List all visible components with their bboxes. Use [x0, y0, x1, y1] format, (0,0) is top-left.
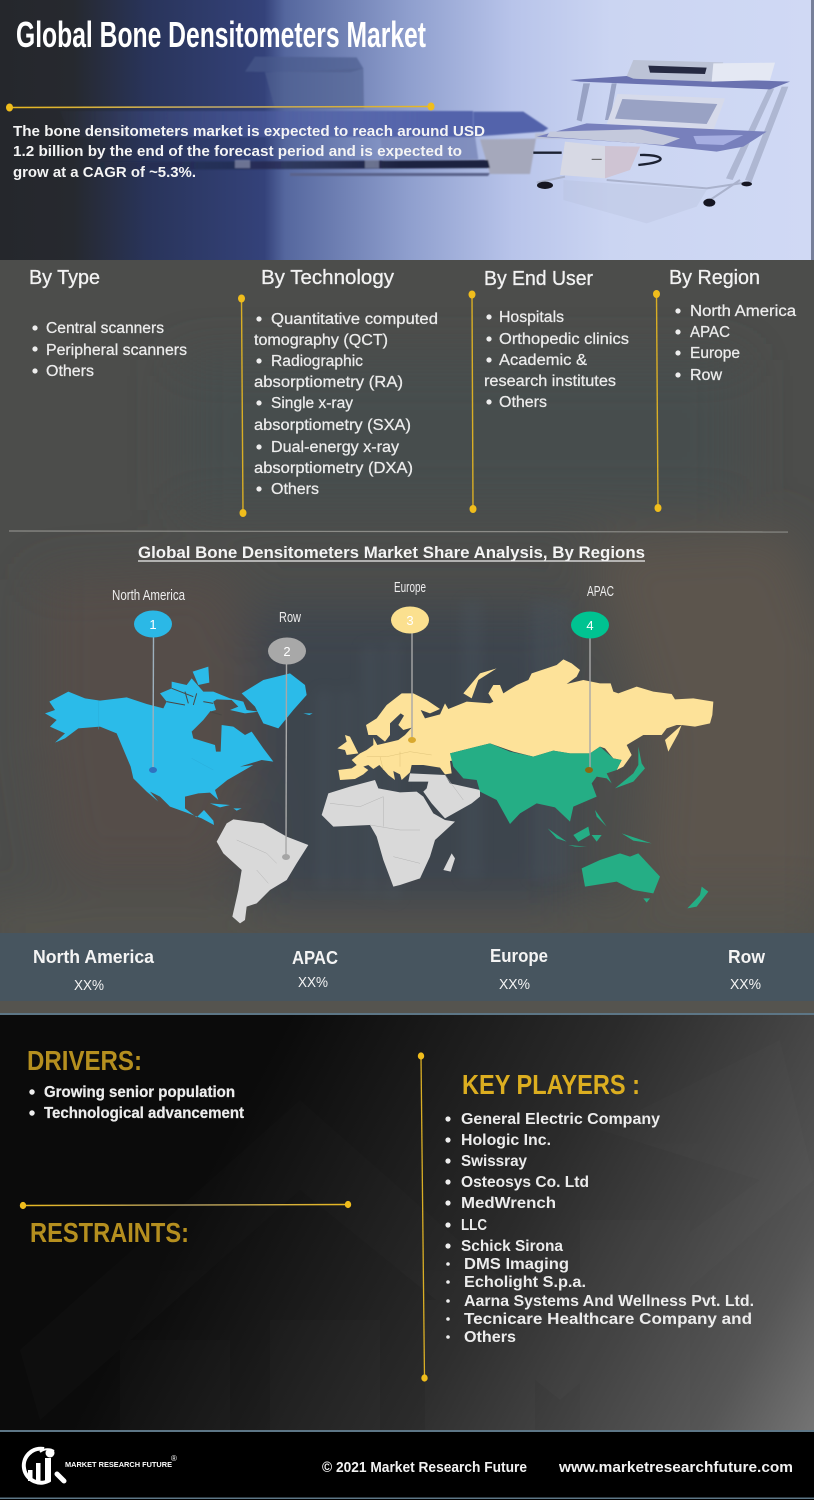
- section divider: [9, 531, 788, 532]
- map region: north america: [45, 667, 313, 825]
- pin 3: europe: Europe: [394, 579, 426, 596]
- list: regions: Row: [690, 367, 723, 384]
- illustration: computer cart: [533, 60, 790, 223]
- map region: greenland: [242, 673, 307, 728]
- list: key players: Schick Sirona: [461, 1238, 563, 1255]
- pin 2: rest of world: [268, 609, 306, 860]
- list: technology segments: Others: [271, 481, 319, 498]
- list: regions: [676, 303, 796, 384]
- intro text: grow at a CAGR of ~5.3%.: [13, 164, 196, 181]
- panel: footer: [0, 1430, 814, 1500]
- legend: apac: APAC: [292, 948, 338, 968]
- pin 4: apac: 4: [586, 618, 594, 633]
- list: key players: Others: [464, 1329, 516, 1346]
- list: type segments: [32, 320, 187, 380]
- vertical gold line: [238, 294, 246, 517]
- pin 1: north america: [112, 587, 185, 773]
- logo: MARKET RESEARCH FUTURE: [65, 1462, 172, 1469]
- list: technology segments: Radiographic: [271, 353, 363, 370]
- list: key players: Swissray: [461, 1153, 527, 1170]
- legend: north america: XX%: [74, 977, 104, 994]
- intro text: [13, 123, 485, 181]
- map region: asia pacific: [450, 743, 708, 908]
- list: technology segments: absorptiometry (SXA): [254, 417, 411, 434]
- intro text: The bone densitometers market is expected to reach around USD: [13, 123, 485, 140]
- heading: by type: By Type: [29, 267, 100, 289]
- list: end user segments: Hospitals: [499, 309, 564, 326]
- list: key players: Aarna Systems And Wellness Pvt. Ltd.: [464, 1293, 754, 1310]
- list: key players: Hologic Inc.: [461, 1132, 551, 1149]
- list: technology segments: absorptiometry (DXA): [254, 460, 413, 477]
- legend: row: [728, 947, 766, 993]
- list: key players: Osteosys Co. Ltd: [461, 1174, 589, 1191]
- list: drivers: Technological advancement: [44, 1105, 244, 1122]
- panel: blurred photo background: [0, 260, 814, 933]
- pin 2: rest of world: 2: [283, 644, 291, 659]
- list: key players: MedWrench: [461, 1195, 556, 1212]
- pin 3: europe: 3: [406, 613, 414, 628]
- legend: europe: Europe: [490, 946, 548, 966]
- list: technology segments: Dual-energy x-ray: [271, 439, 399, 456]
- pin 1: north america: North America: [112, 587, 185, 604]
- list: end user segments: research institutes: [484, 373, 616, 390]
- panel: header banner: [0, 0, 814, 260]
- map region: rest of world: [217, 773, 480, 923]
- list: technology segments: absorptiometry (RA): [254, 374, 403, 391]
- list: key players: Echolight S.p.a.: [464, 1274, 586, 1291]
- pin 1: north america: 1: [149, 617, 157, 632]
- heading: restraints: RESTRAINTS:: [30, 1217, 189, 1248]
- list: end user segments: Academic &: [499, 352, 588, 369]
- panel: by end user: [468, 268, 629, 513]
- gold divider line: [6, 102, 434, 112]
- copyright: © 2021 Market Research Future: [322, 1459, 527, 1476]
- pin 4: apac: APAC: [587, 583, 614, 600]
- vertical gold line: [468, 290, 476, 513]
- title: Global Bone Densitometers Market: [16, 14, 426, 55]
- horizontal gold line: [20, 1201, 351, 1209]
- list: regions: APAC: [690, 324, 730, 341]
- list: end user segments: Others: [499, 394, 547, 411]
- vertical gold line: [653, 290, 662, 512]
- legend: row: XX%: [730, 976, 761, 993]
- panel: by region: [653, 267, 796, 512]
- list: regions: North America: [690, 303, 796, 320]
- legend: north america: North America: [33, 947, 155, 967]
- list: key players: Tecnicare Healthcare Company and: [464, 1311, 752, 1328]
- heading: by technology: By Technology: [261, 267, 394, 289]
- heading: by region: By Region: [669, 267, 760, 289]
- legend: europe: [490, 946, 548, 993]
- legend: row: Row: [728, 947, 766, 967]
- map region: europe and russia: [337, 659, 713, 780]
- illustration: bone densitometer scanner: [60, 57, 560, 176]
- logo: ®: [171, 1454, 177, 1463]
- panel: drivers, restraints and key players: [0, 1015, 814, 1431]
- pin 2: rest of world: Row: [279, 609, 301, 626]
- intro text: 1.2 billion by the end of the forecast period and is expected to: [13, 143, 462, 160]
- legend: north america: [33, 947, 155, 994]
- world map: [45, 659, 713, 923]
- list: key players: General Electric Company: [461, 1111, 660, 1128]
- pin 4: apac: [571, 583, 614, 773]
- list: type segments: Peripheral scanners: [46, 342, 187, 359]
- list: technology segments: tomography (QCT): [254, 332, 388, 349]
- legend: europe: XX%: [499, 976, 530, 993]
- list: key players: LLC: [461, 1217, 487, 1234]
- panel: by type: [29, 267, 187, 380]
- list: technology segments: Single x-ray: [271, 395, 353, 412]
- heading: drivers: DRIVERS:: [27, 1045, 142, 1076]
- list: drivers: [29, 1084, 244, 1122]
- heading: map section: Global Bone Densitometers Market Share Analysis, By Regions: [138, 543, 645, 562]
- list: key players: [445, 1111, 754, 1346]
- heading: by end user: By End User: [484, 268, 593, 290]
- list: type segments: Central scanners: [46, 320, 164, 337]
- vertical gold line: [418, 1052, 428, 1382]
- list: key players: DMS Imaging: [464, 1256, 569, 1273]
- list: end user segments: [484, 309, 629, 411]
- list: type segments: Others: [46, 363, 94, 380]
- list: technology segments: [254, 311, 438, 498]
- panel: by technology: [238, 267, 438, 517]
- heading: key players: KEY PLAYERS :: [462, 1069, 640, 1100]
- website: www.marketresearchfuture.com: [558, 1459, 793, 1476]
- logo: [24, 1448, 177, 1483]
- pin 3: europe: [391, 579, 429, 743]
- list: technology segments: Quantitative computed: [271, 311, 438, 328]
- legend: apac: XX%: [298, 974, 328, 991]
- list: end user segments: Orthopedic clinics: [499, 331, 629, 348]
- list: regions: Europe: [690, 345, 740, 362]
- legend: apac: [292, 948, 338, 991]
- panel: regional share legend: [0, 933, 814, 1015]
- list: drivers: Growing senior population: [44, 1084, 235, 1101]
